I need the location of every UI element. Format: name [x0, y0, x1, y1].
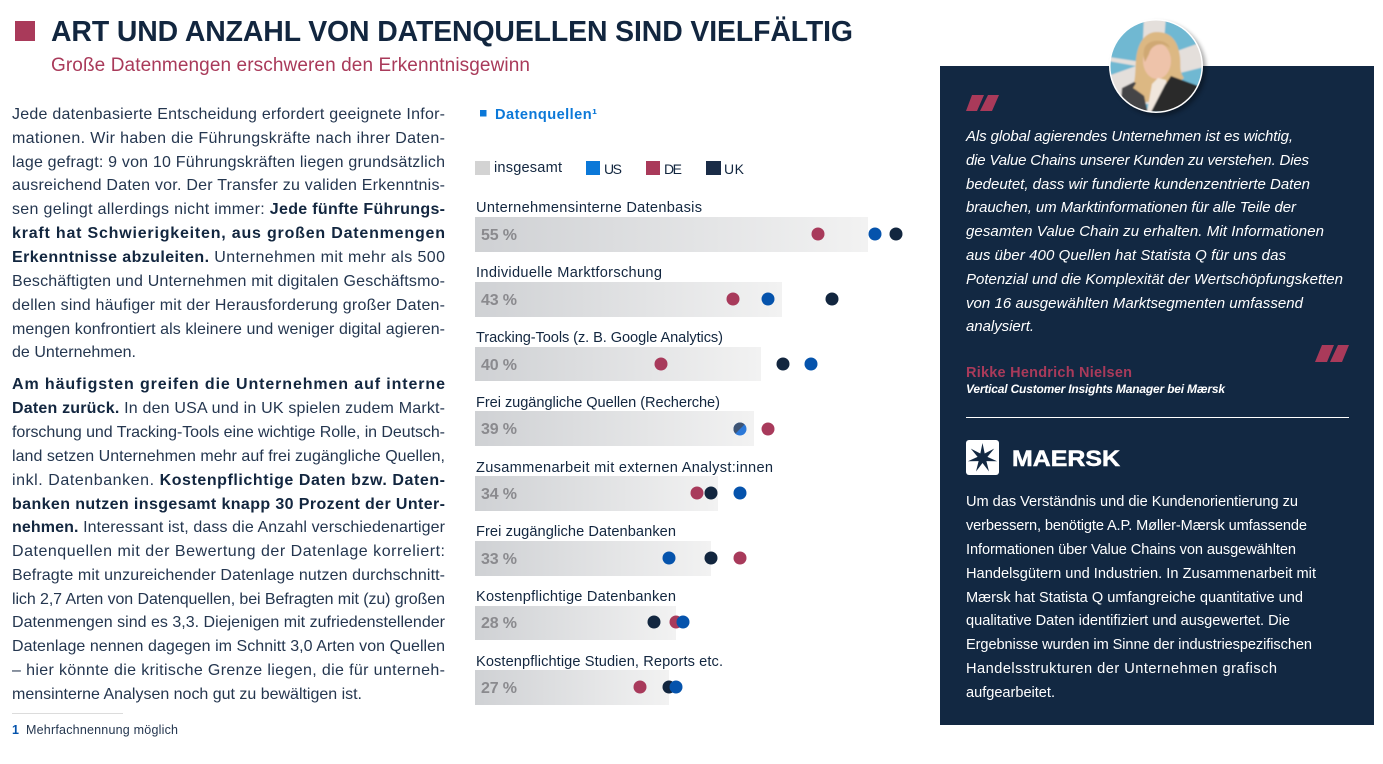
text block: paragraph 1: dellen sind häufiger mit der Herausforderung großer Daten- — [12, 297, 445, 314]
legend: UK — [724, 161, 745, 177]
text block: paragraph 2: nehmen. Interessant ist, dass die Anzahl verschiedenartiger — [12, 519, 446, 536]
row: Kostenpflichtige Datenbanken — [475, 589, 690, 640]
subtitle: Große Datenmengen erschweren den Erkenntnisgewinn — [51, 55, 530, 76]
Maersk description text: Ergebnisse wurden im Sinne der industriespezifischen — [966, 637, 1312, 653]
text block: paragraph 1: kraft hat Schwierigkeiten, aus großen Datenmengen — [12, 225, 445, 242]
text block: paragraph 2 — [12, 376, 446, 703]
text block: paragraph 2: mensinterne Analysen noch gut zu bewältigen ist. — [12, 686, 362, 703]
Maersk description text: aufgearbeitet. — [966, 685, 1055, 701]
text block: paragraph 2: Daten zurück. In den USA und in UK spielen zudem Markt- — [12, 400, 445, 417]
quote author: Vertical Customer Insights Manager bei Mærsk — [966, 382, 1226, 396]
legend: insgesamt — [494, 160, 562, 176]
row: Zusammenarbeit mit externen Analyst:innen: 34 % — [481, 486, 517, 503]
chart: Datenquellen — [475, 107, 902, 705]
row: Frei zugängliche Datenbanken — [475, 524, 746, 576]
row: Individuelle Marktforschung — [475, 265, 838, 317]
quote text: von 16 ausgewählten Marktsegmenten umfassend — [966, 295, 1304, 312]
panel background — [940, 66, 1374, 725]
logo: Maersk — [966, 440, 1120, 475]
row: Kostenpflichtige Studien: Kostenpflichtige Studien, Reports etc. — [476, 654, 723, 670]
text block: paragraph 2: land setzen Unternehmen mehr auf frei zugängliche Quellen, — [12, 448, 445, 465]
text block: paragraph 1: sen gelingt allerdings nicht immer: Jede fünfte Führungs- — [12, 201, 445, 218]
Maersk description text: Handelsstrukturen der Unternehmen grafisch — [966, 661, 1277, 677]
text block: paragraph 2: Datenmengen sind es 3,3. Diejenigen mit zufriedenstellender — [12, 614, 446, 631]
row: Zusammenarbeit mit externen Analyst:innen — [475, 460, 773, 511]
Maersk description text: qualitative Daten identifiziert und ausgewertet. Die — [966, 613, 1290, 629]
quote text: gesamten Value Chain zu erhalten. Mit Informationen — [966, 223, 1324, 240]
row: Kostenpflichtige Datenbanken: Kostenpflichtige Datenbanken — [476, 589, 676, 605]
footnote: 1 — [12, 723, 19, 737]
quote text: bedeutet, dass wir fundierte kundenzentrierte Daten — [966, 176, 1310, 193]
quote text: aus über 400 Quellen hat Statista Q für uns das — [966, 247, 1286, 264]
text block: paragraph 2: Befragte mit unzureichender Datenlage nutzen durchschnitt- — [12, 567, 445, 584]
row: Unternehmensinterne Datenbasis — [475, 200, 902, 252]
icon: opening quote mark — [966, 95, 999, 111]
row: Tracking-Tools: Tracking-Tools (z. B. Google Analytics) — [476, 330, 723, 346]
row: Kostenpflichtige Studien: 27 % — [481, 680, 517, 697]
row: Frei zugängliche Quellen: 39 % — [481, 421, 517, 438]
row: Kostenpflichtige Studien — [475, 654, 723, 705]
text block: paragraph 1: mengen konfrontiert als kleinere und weniger digital agieren- — [12, 321, 445, 338]
text block: paragraph 1: ausreichend Daten vor. Der Transfer zu validen Erkenntnis- — [12, 177, 445, 194]
row: Zusammenarbeit mit externen Analyst:innen: Zusammenarbeit mit externen Analyst:innen — [476, 460, 773, 476]
title: ART UND ANZAHL VON DATENQUELLEN SIND VIELFÄLTIG — [51, 16, 853, 48]
row: Tracking-Tools — [475, 330, 818, 381]
text block: paragraph 1: Erkenntnisse abzuleiten. Unternehmen mit mehr als 500 — [12, 249, 445, 266]
legend: DE — [664, 161, 682, 177]
text block: paragraph 2: Datenlage nennen dagegen im Schnitt 3,0 Arten von Quellen — [12, 638, 445, 655]
Maersk description text: Um das Verständnis und die Kundenorientierung zu — [966, 494, 1298, 510]
legend: US — [604, 161, 622, 177]
legend — [475, 160, 745, 177]
row: Kostenpflichtige Datenbanken: 28 % — [481, 615, 517, 632]
portrait photo — [1102, 16, 1208, 116]
quote text: brauchen, um Marktinformationen für alle Teile der — [966, 199, 1297, 216]
quote author — [966, 365, 1226, 396]
text block: paragraph 1: lage gefragt: 9 von 10 Führungskräften liegen grundsätzlich — [12, 154, 445, 171]
row: Frei zugängliche Quellen: Frei zugängliche Quellen (Recherche) — [476, 395, 720, 411]
text block: paragraph 1 — [12, 106, 445, 361]
Maersk description text: Handelsgütern und Industrien. In Zusammenarbeit mit — [966, 566, 1316, 582]
text block: paragraph 1: Beschäftigten und Unternehmen mit digitalen Geschäftsmo- — [12, 273, 445, 290]
row: Frei zugängliche Datenbanken: Frei zugängliche Datenbanken — [476, 524, 676, 540]
Maersk description text — [966, 494, 1316, 701]
title marker — [15, 21, 35, 41]
logo: Maersk: MAERSK — [1012, 446, 1120, 471]
row: Individuelle Marktforschung: 43 % — [481, 292, 517, 309]
row: Unternehmensinterne Datenbasis: Unternehmensinterne Datenbasis — [476, 200, 702, 216]
footnote — [12, 713, 178, 737]
row: Frei zugängliche Quellen — [475, 395, 774, 446]
text block: paragraph 2: banken nutzen insgesamt knapp 30 Prozent der Unter- — [12, 496, 445, 513]
text block: paragraph 2: Datenquellen mit der Bewertung der Datenlage korreliert: — [12, 543, 445, 560]
text block: paragraph 2: lich 2,7 Arten von Datenquellen, bei Befragten mit (zu) großen — [12, 591, 445, 608]
row: Individuelle Marktforschung: Individuelle Marktforschung — [476, 265, 662, 281]
icon: closing quote mark — [1315, 345, 1349, 362]
text block: paragraph 2: – hier könnte die kritische Grenze liegen, die für unterneh- — [12, 662, 445, 679]
quote text: Potenzial und die Komplexität der Wertschöpfungsketten — [966, 271, 1343, 288]
row: Unternehmensinterne Datenbasis: 55 % — [481, 227, 517, 244]
text block: paragraph 2: inkl. Datenbanken. Kostenpflichtige Daten bzw. Daten- — [12, 472, 445, 489]
footnote: Mehrfachnennung möglich — [26, 723, 178, 737]
row: Frei zugängliche Datenbanken: 33 % — [481, 551, 517, 568]
row: Tracking-Tools: 40 % — [481, 357, 517, 374]
panel: quote and Maersk — [940, 16, 1374, 725]
text block: paragraph 1: Jede datenbasierte Entscheidung erfordert geeignete Infor- — [12, 106, 445, 123]
quote text: analysiert. — [966, 318, 1034, 335]
chart heading: Datenquellen¹ — [495, 107, 597, 123]
quote text: die Value Chains unserer Kunden zu verstehen. Dies — [966, 152, 1310, 169]
quote text: Als global agierendes Unternehmen ist es wichtig, — [965, 128, 1293, 145]
Maersk description text: verbessern, benötigte A.P. Møller-Mærsk umfassende — [966, 518, 1307, 534]
Maersk description text: Informationen über Value Chains von ausgewählten — [966, 542, 1296, 558]
Maersk description text: Mærsk hat Statista Q umfangreiche quantitative und — [966, 590, 1303, 606]
text block: paragraph 2: forschung und Tracking-Tools eine wichtige Rolle, in Deutsch- — [12, 424, 445, 441]
text block: paragraph 1: de Unternehmen. — [12, 344, 136, 361]
text block: paragraph 1: mationen. Wir haben die Führungskräfte nach ihrer Daten- — [12, 130, 445, 147]
text block: paragraph 2: Am häufigsten greifen die Unternehmen auf interne — [12, 376, 445, 393]
quote text — [965, 128, 1343, 335]
quote author: Rikke Hendrich Nielsen — [966, 365, 1132, 381]
